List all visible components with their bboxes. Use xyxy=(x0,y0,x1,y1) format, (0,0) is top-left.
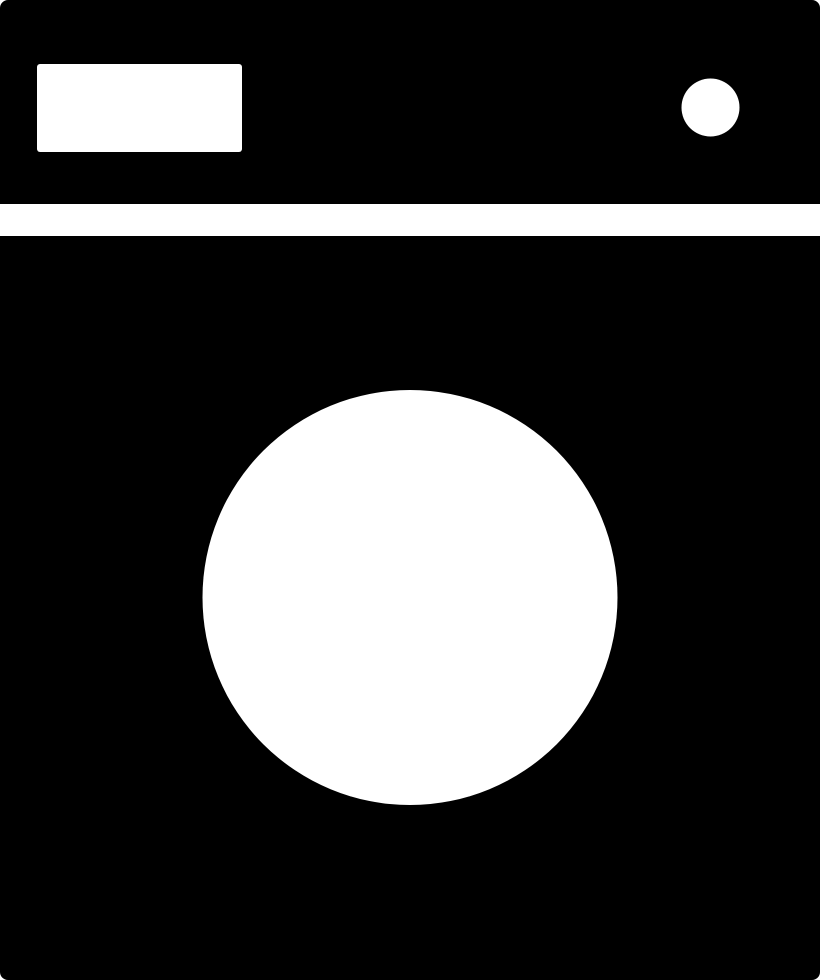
machine body xyxy=(0,236,820,980)
display window xyxy=(37,64,242,152)
door xyxy=(202,390,618,805)
control knob xyxy=(682,78,740,136)
top control panel xyxy=(0,0,820,204)
